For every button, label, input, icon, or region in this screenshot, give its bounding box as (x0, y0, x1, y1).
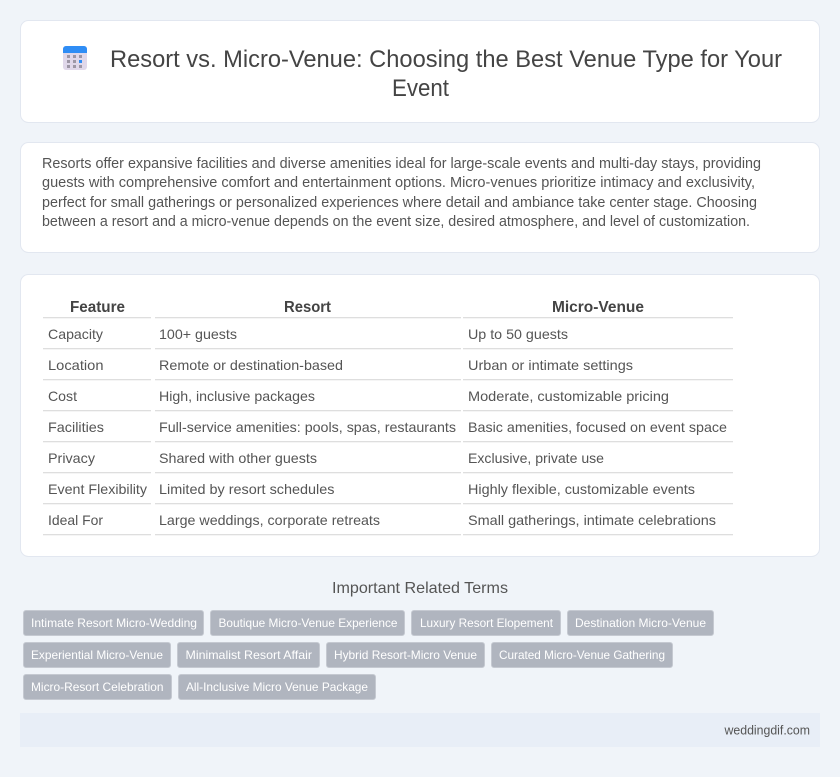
row: privacy (48, 450, 604, 466)
row: cost (48, 388, 669, 404)
tags: related terms: Intimate Resort Micro-Wedding (31, 616, 197, 630)
tags: related terms: Micro-Resort Celebration (31, 680, 164, 694)
tags: related terms: Minimalist Resort Affair (186, 648, 312, 662)
row: capacity: 100+ guests (159, 326, 237, 342)
icon: calendar (63, 46, 87, 70)
row: facilities (48, 419, 727, 435)
tags: related terms: Boutique Micro-Venue Experience (218, 616, 398, 630)
panel: summary (20, 142, 820, 252)
tags: related terms: Experiential Micro-Venue (31, 648, 163, 662)
text block: summary paragraph: Resorts offer expansive facilities and diverse amenities ideal for large-scale events and multi-day stays, providing (42, 156, 761, 172)
title (110, 46, 782, 102)
tags: related terms: All-Inclusive Micro Venue Package (186, 680, 368, 694)
row: cost: Cost (48, 388, 77, 404)
heading: related terms: Important Related Terms (332, 580, 508, 597)
table header (70, 299, 644, 316)
row: event flexibility: Event Flexibility (48, 481, 147, 497)
tags: related terms: Destination Micro-Venue (575, 616, 706, 630)
footer (20, 713, 820, 747)
row: ideal for: Small gatherings, intimate celebrations (468, 512, 716, 528)
title: Resort vs. Micro-Venue: Choosing the Best Venue Type for Your (110, 46, 782, 73)
text block: summary paragraph (42, 156, 761, 230)
tags: related terms: Curated Micro-Venue Gathering (499, 648, 665, 662)
row: event flexibility (48, 481, 695, 497)
row: capacity: Capacity (48, 326, 103, 342)
row: privacy: Privacy (48, 450, 95, 466)
row: privacy: Shared with other guests (159, 450, 317, 466)
row: location: Location (48, 357, 104, 373)
row: location (48, 357, 633, 373)
row: ideal for: Large weddings, corporate retreats (159, 512, 380, 528)
table header: Micro-Venue (552, 299, 644, 316)
tags: related terms: Luxury Resort Elopement (420, 616, 554, 630)
text block: summary paragraph: between a resort and a micro-venue depends on the event size, desired atmosphere, and level of customization. (42, 214, 750, 230)
row: location: Remote or destination-based (159, 357, 343, 373)
row: facilities: Basic amenities, focused on event space (468, 419, 727, 435)
panel: title header (20, 20, 820, 122)
row: location: Urban or intimate settings (468, 357, 633, 373)
row: event flexibility: Highly flexible, customizable events (468, 481, 695, 497)
tags: related terms: Hybrid Resort-Micro Venue (334, 648, 477, 662)
row: cost: Moderate, customizable pricing (468, 388, 669, 404)
row: facilities: Full-service amenities: pools, spas, restaurants (159, 419, 456, 435)
text block: summary paragraph: perfect for small gatherings or personalized experiences where detail and ambiance take center stage. Choosing (42, 195, 757, 211)
row: privacy: Exclusive, private use (468, 450, 604, 466)
panel: comparison table (20, 274, 820, 556)
title: Event (392, 75, 449, 102)
row: cost: High, inclusive packages (159, 388, 315, 404)
footer source text: weddingdif.com (724, 724, 810, 738)
row: event flexibility: Limited by resort schedules (159, 481, 334, 497)
tags: related terms (24, 610, 714, 700)
text block: summary paragraph: guests with comprehensive comfort and entertainment options. Micro-venues prioritize intimacy and exclusivity, (42, 175, 755, 191)
row: ideal for: Ideal For (48, 512, 103, 528)
row: facilities: Facilities (48, 419, 104, 435)
table header: Resort (284, 299, 332, 316)
row: capacity: Up to 50 guests (468, 326, 568, 342)
table header: Feature (70, 299, 125, 316)
row: capacity (48, 326, 568, 342)
row: ideal for (48, 512, 716, 528)
